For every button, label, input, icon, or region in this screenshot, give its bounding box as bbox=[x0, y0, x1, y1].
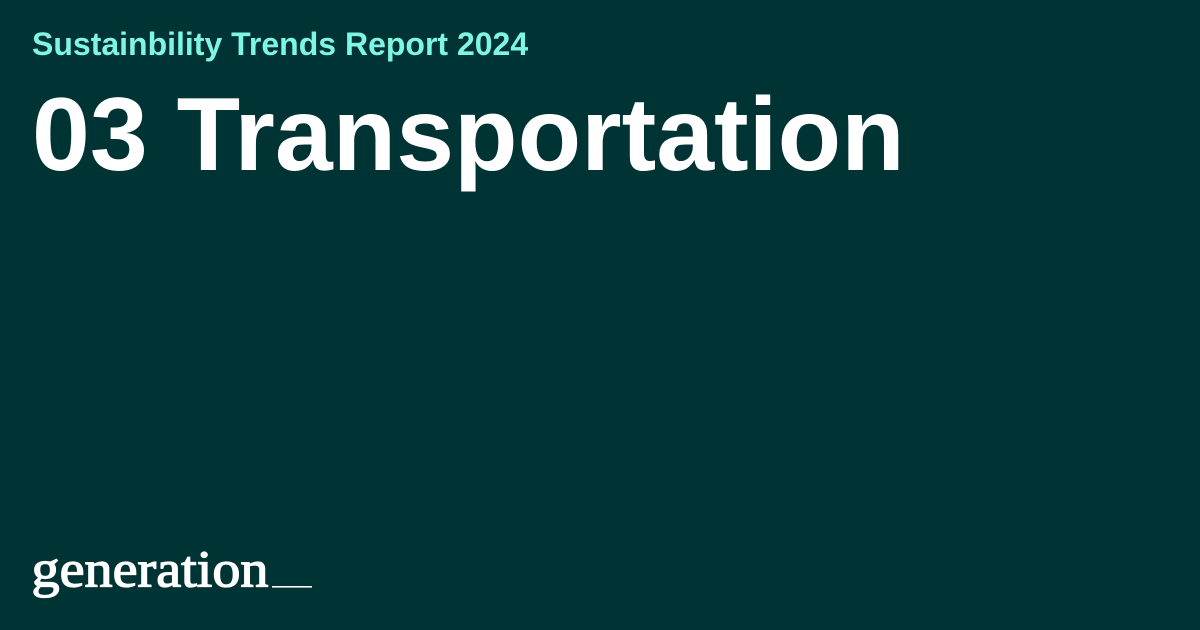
subtitle: Sustainbility Trends Report 2024 bbox=[32, 26, 528, 62]
title: 03 Transportation bbox=[32, 77, 905, 193]
logo: generation wordmark: generation bbox=[32, 542, 268, 598]
